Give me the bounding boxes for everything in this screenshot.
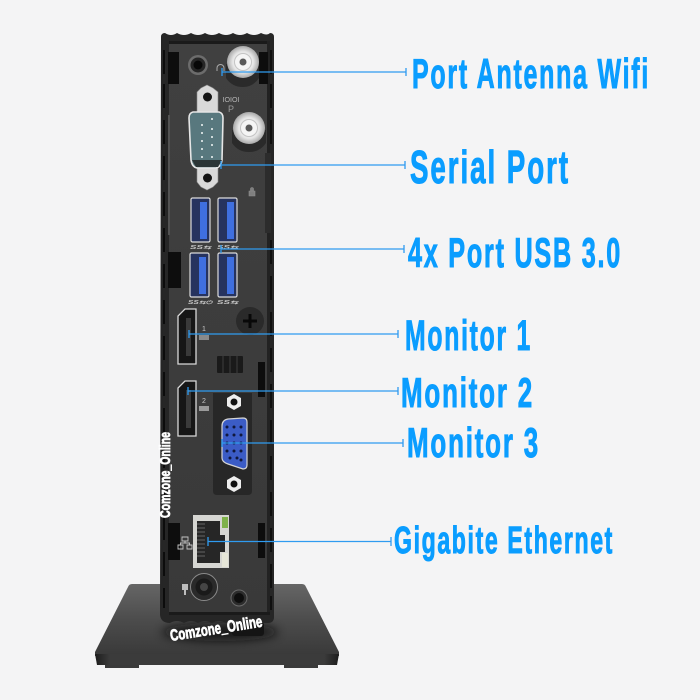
usb port bottom left bbox=[190, 253, 209, 297]
leader line: monitor 1 bbox=[189, 330, 398, 338]
device body bbox=[160, 33, 274, 623]
icon: headset mark bbox=[217, 65, 224, 71]
leader line: antenna bbox=[222, 68, 406, 76]
displayport 1 mark bbox=[199, 326, 209, 340]
usb speed marks bbox=[188, 245, 240, 306]
ethernet port bbox=[193, 515, 229, 568]
watermark vertical: Comzone_Online bbox=[157, 432, 174, 518]
leader line: serial bbox=[221, 161, 405, 169]
label: Monitor 3: Monitor 3 bbox=[407, 419, 540, 466]
usb speed marks: SS⇆ bbox=[190, 245, 213, 251]
serial port marks: IOIOI bbox=[222, 97, 240, 104]
usb port top left bbox=[191, 198, 210, 242]
usb speed marks: SS⇆ bbox=[217, 300, 240, 306]
thumb screw bbox=[236, 307, 264, 335]
leader line: usb bbox=[221, 245, 404, 253]
power jack bbox=[190, 574, 218, 600]
watermark base: Comzone_Online bbox=[169, 614, 264, 645]
usb port top right bbox=[218, 198, 237, 242]
leader line: monitor 2 bbox=[188, 387, 398, 395]
usb speed marks: SS⇆ bbox=[217, 245, 240, 251]
displayport 1 bbox=[178, 309, 196, 364]
displayport 2 bbox=[178, 381, 196, 436]
label: Monitor 2: Monitor 2 bbox=[401, 369, 534, 416]
icon: power plug bbox=[182, 584, 188, 595]
audio jack bbox=[188, 55, 208, 75]
cable clip bbox=[217, 356, 243, 373]
side notches and slots bbox=[168, 52, 271, 560]
serial port marks bbox=[222, 97, 240, 114]
displayport 2 mark bbox=[199, 398, 209, 411]
usb port bottom right bbox=[218, 253, 237, 297]
icon: lock bbox=[249, 188, 255, 196]
label: Monitor 1: Monitor 1 bbox=[405, 312, 532, 360]
serial port bbox=[189, 85, 223, 190]
label: Serial Port: Serial Port bbox=[410, 141, 570, 193]
displayport 1 mark: 1 bbox=[202, 326, 206, 333]
wifi antenna connector top bbox=[226, 46, 259, 87]
stand base bbox=[95, 584, 339, 668]
usb speed marks: SS⇆⏻ bbox=[188, 300, 214, 306]
icon: network bbox=[178, 537, 192, 549]
leader line: ethernet bbox=[208, 537, 391, 546]
displayport 2 mark: 2 bbox=[202, 398, 206, 405]
vga port bbox=[213, 393, 252, 495]
serial port marks: P bbox=[228, 104, 234, 114]
wifi antenna connector lower bbox=[232, 112, 266, 152]
small jack bbox=[231, 590, 247, 606]
leader line: monitor 3 bbox=[222, 439, 403, 447]
